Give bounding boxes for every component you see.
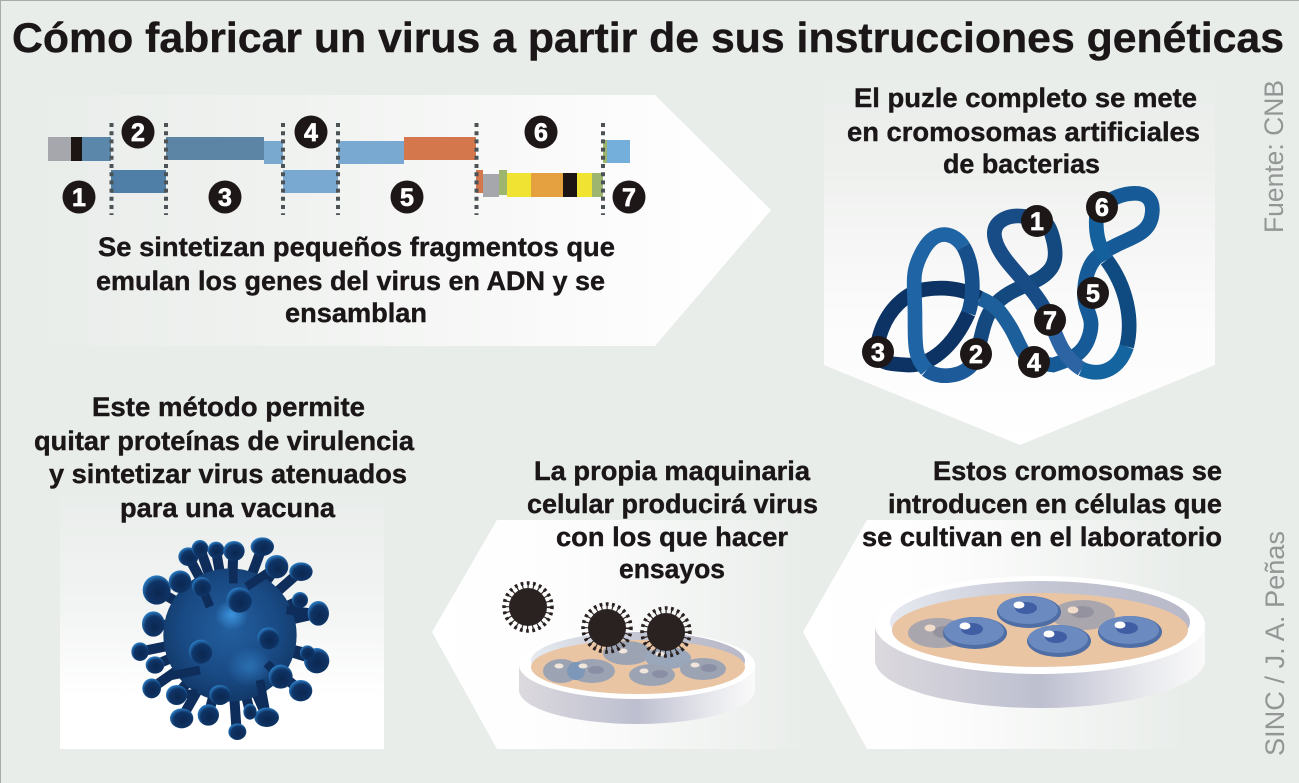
chromosome number badges: 5 bbox=[1086, 280, 1100, 308]
chromosome number badges: 3 bbox=[871, 339, 885, 367]
chromosome knot bbox=[877, 193, 1152, 376]
panel: step 2 chromosome arrow bbox=[824, 72, 1215, 445]
number badges: 3 bbox=[218, 184, 232, 212]
blue cells bbox=[943, 596, 1162, 657]
step 2 text: El puzle completo se mete bbox=[854, 83, 1197, 113]
petri dish with blue cells bbox=[875, 576, 1205, 708]
step 3 text: introducen en células que bbox=[888, 489, 1222, 519]
panel: vaccine virus bbox=[34, 392, 415, 749]
infected cells bbox=[543, 641, 726, 686]
step 4 text: La propia maquinaria bbox=[534, 456, 811, 486]
step 4 text: ensayos bbox=[619, 554, 725, 584]
step 1 text: ensamblan bbox=[285, 298, 427, 328]
step 4 text: celular producirá virus bbox=[527, 489, 818, 519]
chromosome number badges: 6 bbox=[1095, 194, 1109, 222]
step 3 text: se cultivan en el laboratorio bbox=[862, 522, 1222, 552]
chromosome number badges: 4 bbox=[1027, 349, 1041, 377]
step 4 text bbox=[527, 456, 818, 584]
number badges: 7 bbox=[622, 184, 636, 212]
genome fragments strip bbox=[48, 137, 630, 197]
vaccine text: para una vacuna bbox=[120, 493, 336, 523]
step 2 text bbox=[847, 83, 1200, 179]
petri dish with virus production bbox=[504, 583, 755, 724]
step 1 text bbox=[96, 232, 615, 328]
step 1 text: Se sintetizan pequeños fragmentos que bbox=[98, 232, 615, 262]
author credit: SINC / J. A. Peñas bbox=[1260, 531, 1290, 756]
number badges: 5 bbox=[400, 184, 414, 212]
panel: step 3 petri arrow bbox=[803, 520, 1250, 749]
vaccine text: Este método permite bbox=[92, 392, 365, 422]
chromosome number badges: 1 bbox=[1030, 208, 1044, 236]
number badges: 4 bbox=[304, 119, 318, 147]
step 1 text: emulan los genes del virus en ADN y se bbox=[96, 266, 605, 296]
panel: step 4 petri arrow bbox=[432, 520, 870, 749]
step 4 text: con los que hacer bbox=[556, 522, 788, 552]
vaccine text: y sintetizar virus atenuados bbox=[49, 459, 407, 489]
number badges: 1 bbox=[72, 184, 86, 212]
number badges bbox=[62, 116, 646, 214]
panel: step 1 synthesis arrow bbox=[30, 95, 771, 346]
number badges: 2 bbox=[131, 119, 145, 147]
black virus particles bbox=[504, 583, 690, 656]
step 3 text bbox=[862, 456, 1222, 552]
step 2 text: de bacterias bbox=[943, 149, 1100, 179]
icon: blue virus bbox=[131, 537, 329, 740]
dotted cut lines bbox=[112, 123, 603, 215]
source credit: Fuente: CNB bbox=[1259, 80, 1289, 233]
gray cells bbox=[908, 600, 1115, 648]
step 3 text: Estos cromosomas se bbox=[933, 456, 1222, 486]
vaccine text: quitar proteínas de virulencia bbox=[34, 426, 415, 456]
title: Cómo fabricar un virus a partir de sus instrucciones genéticas bbox=[12, 14, 1284, 61]
chromosome number badges bbox=[862, 191, 1118, 378]
step 2 text: en cromosomas artificiales bbox=[847, 117, 1200, 147]
number badges: 6 bbox=[534, 119, 548, 147]
vaccine text bbox=[34, 392, 415, 523]
chromosome number badges: 2 bbox=[969, 341, 983, 369]
chromosome number badges: 7 bbox=[1043, 307, 1057, 335]
